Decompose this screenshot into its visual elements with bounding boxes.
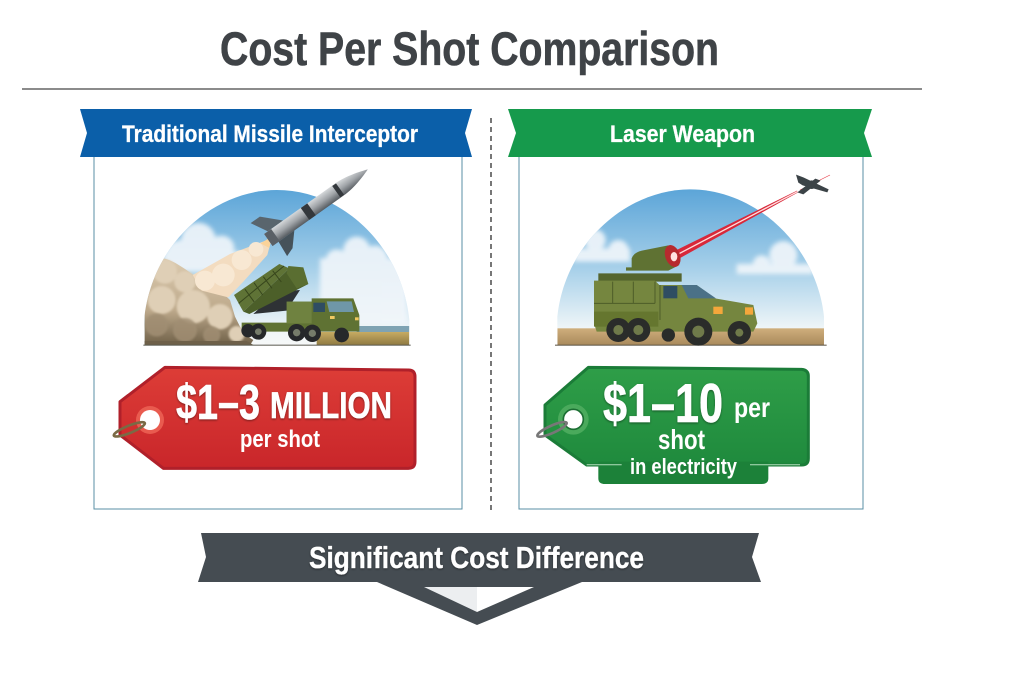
- price tag: $1-10 per shot in electricity: shot: [658, 424, 705, 455]
- exhaust plume: [193, 237, 272, 297]
- panel: laser weapon: [508, 109, 872, 509]
- price tag: $1-10 per shot in electricity: in electricity: [630, 454, 738, 479]
- price tag: $1-3 million per shot: per shot: [240, 426, 320, 453]
- price tag: $1-10 per shot in electricity: [536, 367, 808, 484]
- price tag: $1-10 per shot in electricity: per: [734, 392, 770, 423]
- truck: [241, 298, 359, 342]
- divider: [490, 118, 492, 512]
- turret: [626, 243, 683, 273]
- price tag: $1-10 per shot in electricity: $1–10: [603, 372, 723, 434]
- banner: significant cost difference: Significant Cost Difference: [309, 540, 644, 575]
- ribbon heading: laser weapon: [508, 109, 872, 157]
- price tag: $1-3 million per shot: [113, 367, 415, 468]
- ribbon heading: traditional missile interceptor: [80, 109, 472, 157]
- title: Cost Per Shot Comparison: [220, 22, 719, 75]
- illustration: laser truck: [555, 175, 830, 346]
- target aircraft: [796, 175, 829, 194]
- truck: [594, 273, 757, 346]
- launcher pods: [234, 264, 308, 314]
- laser beam: [671, 175, 830, 261]
- illustration: missile launch: [143, 150, 411, 346]
- ribbon heading: traditional missile interceptor: Traditional Missile Interceptor: [122, 121, 418, 148]
- panel: traditional missile interceptor: [80, 109, 472, 509]
- price tag: $1-3 million per shot: MILLION: [270, 385, 392, 426]
- banner: significant cost difference: [198, 533, 761, 625]
- missile: [251, 150, 382, 262]
- ribbon heading: laser weapon: Laser Weapon: [610, 121, 755, 148]
- price tag: $1-3 million per shot: $1–3: [176, 376, 260, 430]
